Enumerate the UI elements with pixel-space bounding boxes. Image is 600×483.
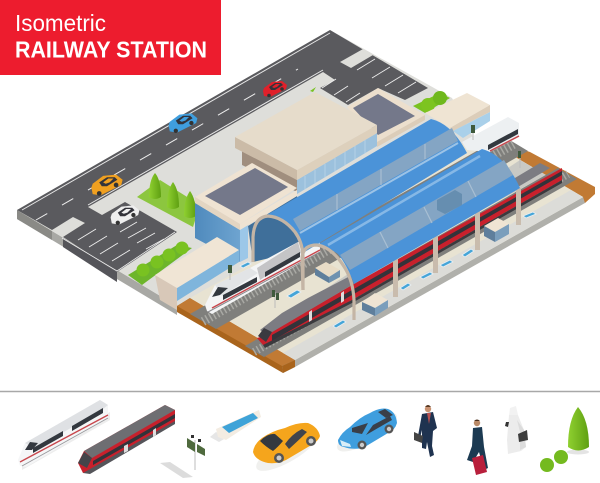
lawn with trees xyxy=(137,173,200,227)
ground base xyxy=(17,30,480,315)
benches xyxy=(240,212,536,328)
beige block at lower left xyxy=(155,237,239,310)
front vault roof xyxy=(306,149,520,284)
railway tracks xyxy=(190,136,577,357)
columns xyxy=(393,188,521,297)
lawn with bushes, right xyxy=(310,87,450,113)
item: platform sign xyxy=(160,435,205,478)
lawn with bushes xyxy=(128,242,192,285)
item: tall tree xyxy=(567,407,589,454)
station site illustration xyxy=(17,30,595,373)
item: blue car xyxy=(332,405,402,459)
item: white train xyxy=(18,400,110,470)
small rear building xyxy=(347,88,425,147)
far white train xyxy=(462,117,519,152)
rear vault roof xyxy=(265,119,467,253)
main hall roof xyxy=(235,92,377,192)
divider line xyxy=(0,390,600,392)
item: bench xyxy=(210,410,261,442)
person: businessman with briefcase xyxy=(414,405,437,457)
person: traveller with red suitcase xyxy=(467,420,488,475)
item: red train xyxy=(78,405,175,474)
platform signs xyxy=(228,125,521,308)
far beige block xyxy=(425,93,490,138)
white high-speed train xyxy=(205,240,320,314)
shelters on platforms xyxy=(315,218,509,316)
station floor and platforms xyxy=(177,135,595,373)
item: bushes xyxy=(540,450,568,472)
cars on the road xyxy=(91,81,287,225)
title banner xyxy=(0,0,221,75)
person: man in white robe xyxy=(505,406,528,454)
front block of station xyxy=(195,163,303,262)
title banner: Isometric xyxy=(15,10,106,36)
red regional train xyxy=(257,163,562,348)
title banner: RAILWAY STATION xyxy=(15,36,207,62)
item: taxi xyxy=(251,423,323,478)
station arches xyxy=(253,216,354,320)
glass wall of main hall xyxy=(297,133,377,194)
road and parking lots xyxy=(17,30,428,272)
